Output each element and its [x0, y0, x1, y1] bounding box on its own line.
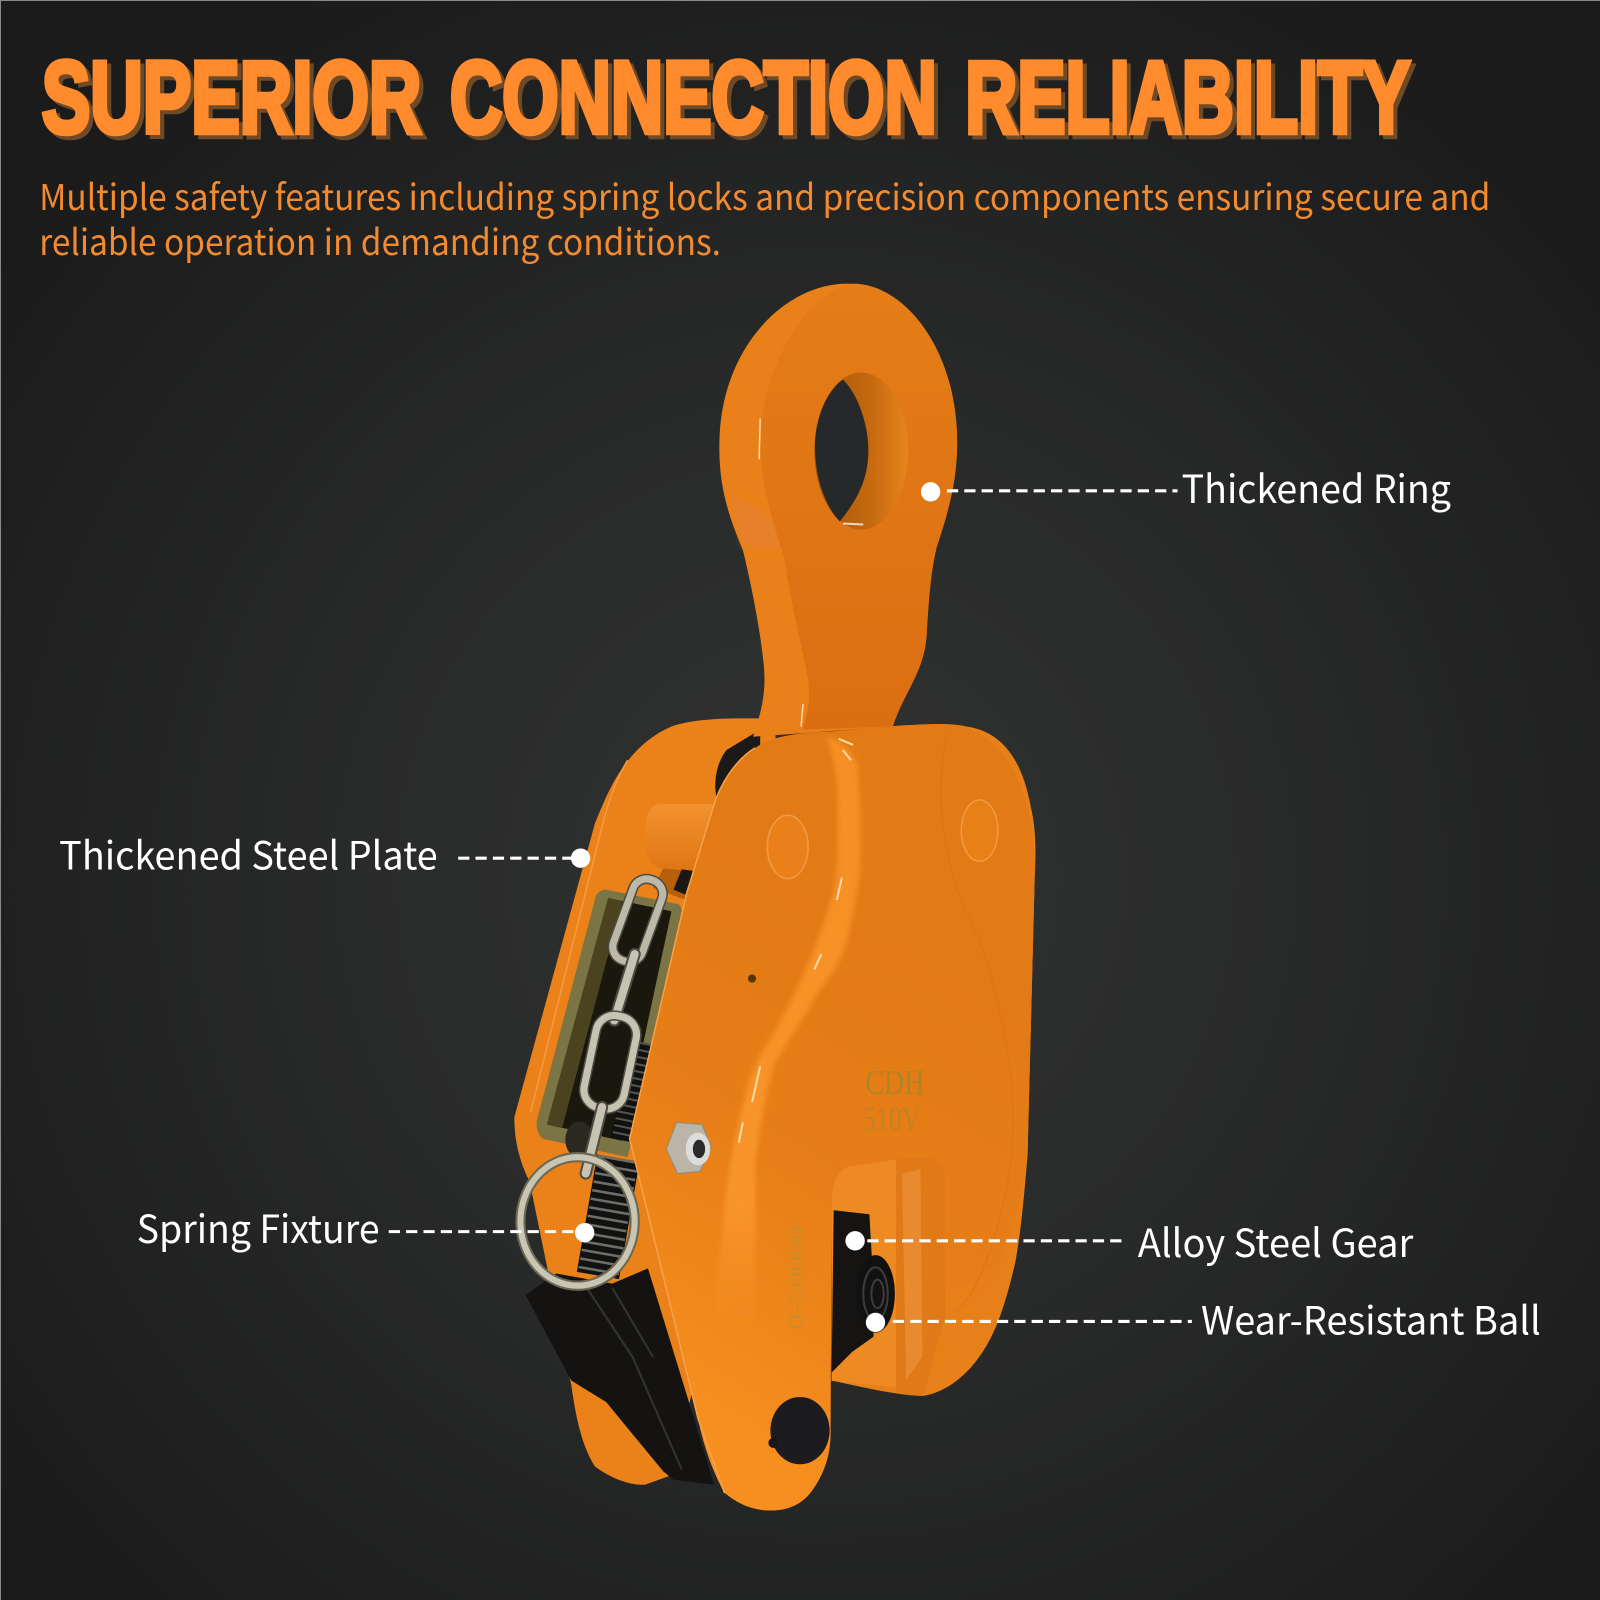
rear plate chamfer line: [531, 760, 628, 1112]
pull ring: [520, 1157, 635, 1286]
ridge highlights: [739, 739, 853, 1143]
black latch jaw: [526, 1268, 714, 1485]
compression spring: [598, 1043, 645, 1276]
title: CONNECTION: [450, 41, 937, 155]
callout: alloy steel gear: Alloy Steel Gear: [1138, 1213, 1414, 1269]
subtitle: reliable operation in demanding conditions.: [39, 215, 721, 266]
rivet right: [961, 800, 998, 861]
title: SUPERIOR: [42, 41, 421, 155]
title: CONNECTION: [454, 45, 941, 159]
product: vertical plate lifting clamp: [514, 284, 1035, 1511]
raised ridge: [714, 737, 861, 1327]
callout: wear-resistant ball: Wear-Resistant Ball: [1201, 1291, 1541, 1347]
subtitle: Multiple safety features including spring locks and precision components ensuring secure and: [39, 170, 1490, 221]
callout: alloy steel gear: [845, 1213, 1414, 1269]
black cam behind plate: [715, 730, 760, 806]
callout: spring fixture: Spring Fixture: [137, 1199, 380, 1255]
chain: [580, 875, 667, 1173]
small hole: [748, 974, 756, 983]
alloy steel gear: [832, 1210, 873, 1372]
subtitle: [39, 170, 1490, 266]
axle cap: [768, 1397, 830, 1464]
rear plate: [514, 718, 776, 1485]
jaw notch interior: [832, 1155, 945, 1396]
plate left bevel: [630, 748, 755, 1493]
title: RELIABILITY: [969, 45, 1414, 159]
right lobe backing: [832, 724, 1035, 1396]
callout: wear-resistant ball: [866, 1291, 1541, 1347]
cross pin: [645, 804, 714, 903]
chain bracket: [537, 890, 682, 1158]
stamped text: 510V: [863, 1100, 920, 1139]
callout: thickened ring: [921, 459, 1451, 515]
title: SUPERIOR: [46, 45, 426, 159]
callout: thickened steel plate: Thickened Steel Plate: [59, 825, 438, 881]
callout: thickened ring: Thickened Ring: [1182, 459, 1451, 515]
thickened ring: [719, 284, 957, 737]
jaw gloss: [587, 1288, 682, 1469]
front plate: [630, 724, 1035, 1511]
rivet left: [767, 815, 808, 879]
right lobe contour: [941, 733, 1013, 1311]
hex bolt: [666, 1122, 711, 1173]
title: RELIABILITY: [965, 41, 1410, 155]
side stamp: 0-50000: [783, 1224, 808, 1330]
wear-resistant ball: [856, 1255, 895, 1333]
callout: spring fixture: [137, 1199, 594, 1255]
stamped text: CDH: [865, 1063, 924, 1102]
title: [42, 41, 1414, 159]
stamped text: [863, 1063, 924, 1139]
